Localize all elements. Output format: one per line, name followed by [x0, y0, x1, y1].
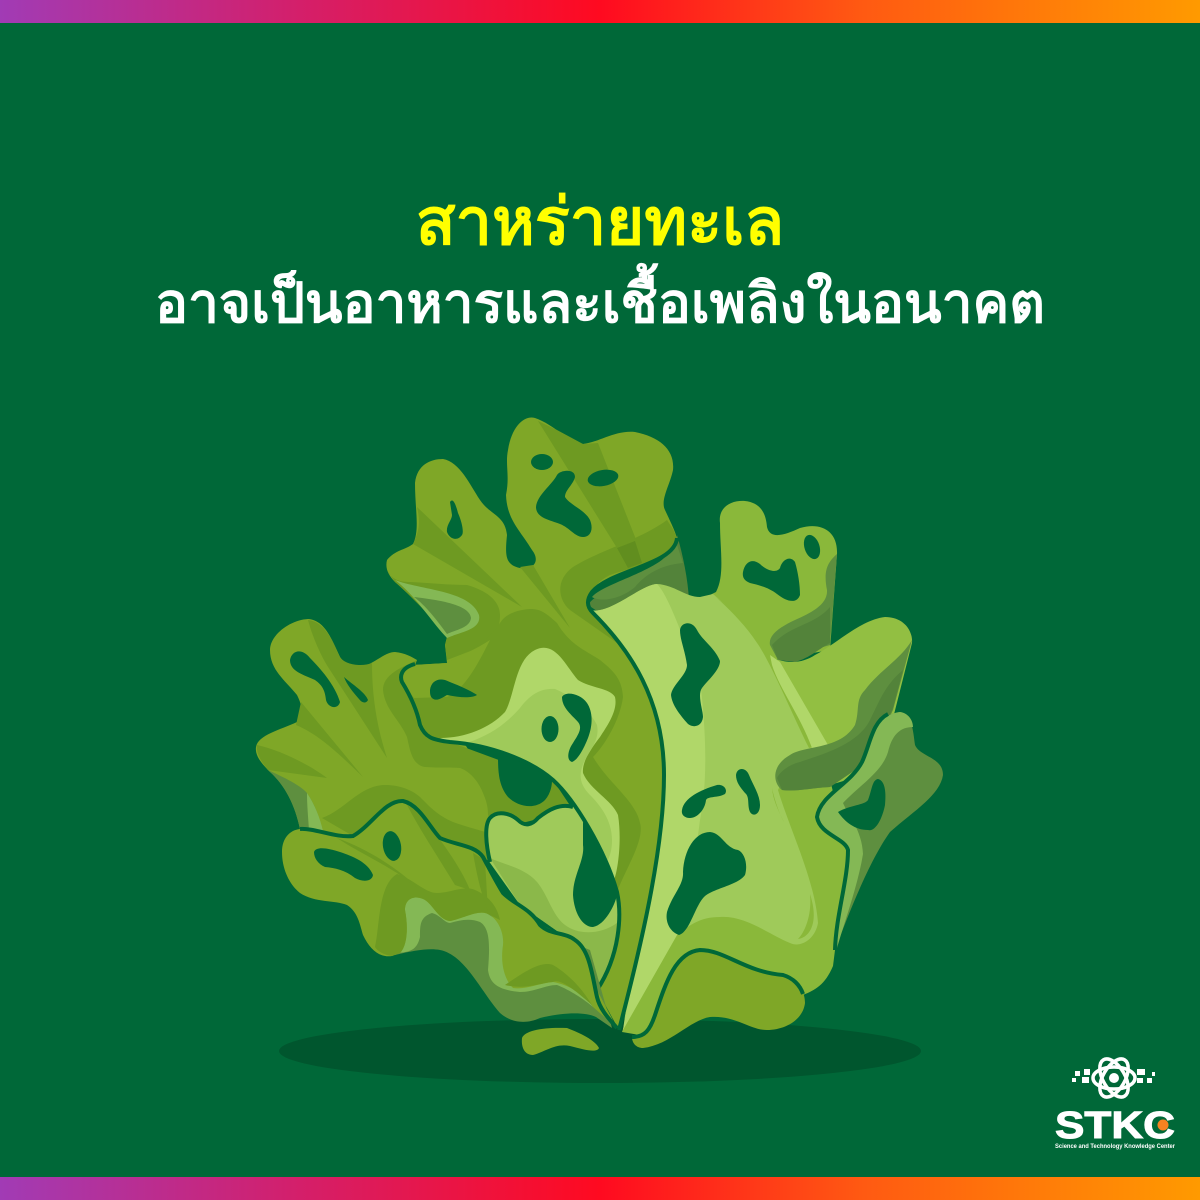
bottom right leaf: [632, 950, 805, 1048]
arc outline: [401, 664, 619, 990]
right top leaf: [700, 501, 837, 662]
light strip: [590, 584, 705, 1030]
hole: [447, 500, 463, 539]
notch shade light: [395, 580, 479, 638]
hole: [536, 471, 592, 537]
big hole under arc: [498, 753, 552, 806]
logo: STKC: [1055, 1054, 1175, 1150]
hole: [586, 467, 620, 489]
dark patch: [375, 874, 500, 956]
hole: [801, 533, 823, 561]
hole: [562, 694, 592, 762]
right lower base leaf: [622, 780, 848, 1036]
inner leaf outline: [486, 806, 573, 862]
hole: [743, 559, 800, 601]
hole: [667, 832, 746, 935]
back shade of lower left leaf: [395, 890, 612, 1028]
hole: [314, 848, 373, 881]
hole: [531, 454, 553, 470]
lower crease: [772, 788, 814, 939]
lower left outline: [300, 801, 617, 1028]
hole: [682, 785, 726, 818]
lighter patch: [402, 640, 490, 698]
right side back leaf: [817, 712, 943, 950]
title: highlighted line: สาหร่ายทะเล: [416, 185, 784, 258]
logo wordmark: STKC: [1055, 1105, 1175, 1147]
title: subtitle line: อาจเป็นอาหารและเชื้อเพลิงในอนาคต: [155, 272, 1045, 334]
fold band over lower leaf: [322, 785, 490, 862]
upper left leaves: [386, 417, 677, 1030]
logo pixel squares: [1072, 1069, 1155, 1083]
ground shadow: [279, 1019, 921, 1083]
hole: [671, 623, 720, 726]
fold band under arc: [383, 660, 573, 830]
hole: [381, 830, 403, 862]
hole: [344, 677, 368, 703]
right wing leaf: [760, 617, 912, 800]
logo tagline: Science and Technology Knowledge Center: [1055, 1143, 1175, 1150]
logo atom icon: [1093, 1054, 1135, 1102]
crease: [715, 596, 813, 748]
teardrop hole: [573, 822, 617, 927]
left leaf: [256, 619, 573, 862]
left leaf shade: [268, 770, 322, 831]
back shade behind stem: [588, 535, 689, 613]
bottom leaf outline: [632, 950, 803, 1037]
hole: [290, 651, 340, 707]
lower left leaf: [282, 801, 617, 1028]
hole: [736, 769, 760, 815]
small foot blob: [522, 1028, 599, 1055]
wing shade tongue: [775, 640, 912, 791]
light inner shape: [467, 689, 612, 860]
rays: [413, 421, 637, 628]
stem outline: [588, 538, 677, 1030]
crease highlight: [770, 655, 828, 748]
side leaf outline: [817, 714, 888, 950]
lightest shape: [440, 648, 620, 880]
rays: [337, 805, 592, 1005]
notch fold: [387, 570, 500, 660]
main central leaf: [590, 584, 828, 1030]
hole: [430, 679, 477, 700]
inner rounded leaf: [486, 805, 619, 990]
left leaf rays: [257, 620, 387, 778]
central fold with stem band: [401, 609, 641, 990]
fold under stroke: [560, 520, 677, 645]
logo orange dot: [1158, 1120, 1168, 1130]
hole: [542, 716, 558, 742]
hole in side leaf: [838, 779, 885, 830]
notch shade dark: [414, 597, 471, 634]
bottom gradient bar: [0, 1177, 1200, 1200]
top gradient bar: [0, 0, 1200, 23]
inner leaf lower tone: [490, 858, 620, 990]
